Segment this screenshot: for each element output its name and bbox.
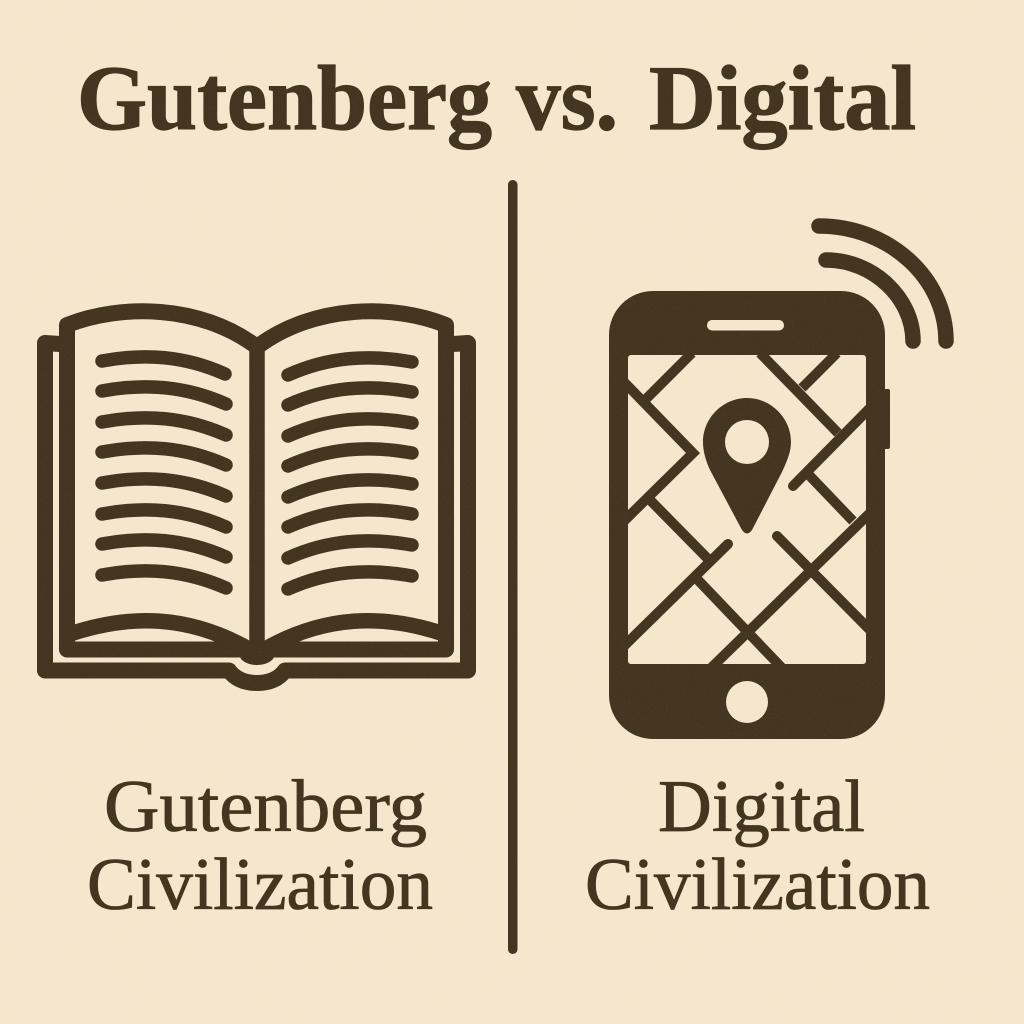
title: Digital (649, 47, 916, 149)
title: vs. (516, 47, 618, 149)
back cover (45, 343, 468, 683)
bottom page curves (70, 621, 444, 652)
title: Gutenberg (77, 47, 492, 149)
label: Digital Civilization (585, 766, 930, 926)
label: Gutenberg Civilization (87, 766, 433, 926)
map pin (703, 398, 791, 534)
map roads (624, 353, 870, 668)
label: Digital Civilization: Civilization (585, 844, 930, 926)
label: Gutenberg Civilization: Gutenberg (104, 766, 427, 848)
phone body (609, 291, 885, 739)
icon: smartphone with map (609, 226, 946, 739)
spine bump (238, 652, 276, 665)
left page text lines (102, 357, 226, 588)
title (77, 47, 916, 149)
spine (249, 345, 265, 660)
map screen (628, 355, 866, 664)
center divider (508, 180, 518, 954)
home button (726, 681, 768, 723)
speaker (707, 320, 784, 330)
side button (880, 389, 890, 449)
label: Gutenberg Civilization: Civilization (87, 844, 433, 926)
label: Digital Civilization: Digital (658, 766, 865, 848)
wifi signal arcs (819, 226, 946, 341)
icon: open book (45, 311, 468, 683)
page frame (67, 311, 446, 650)
right page text lines (288, 358, 412, 589)
